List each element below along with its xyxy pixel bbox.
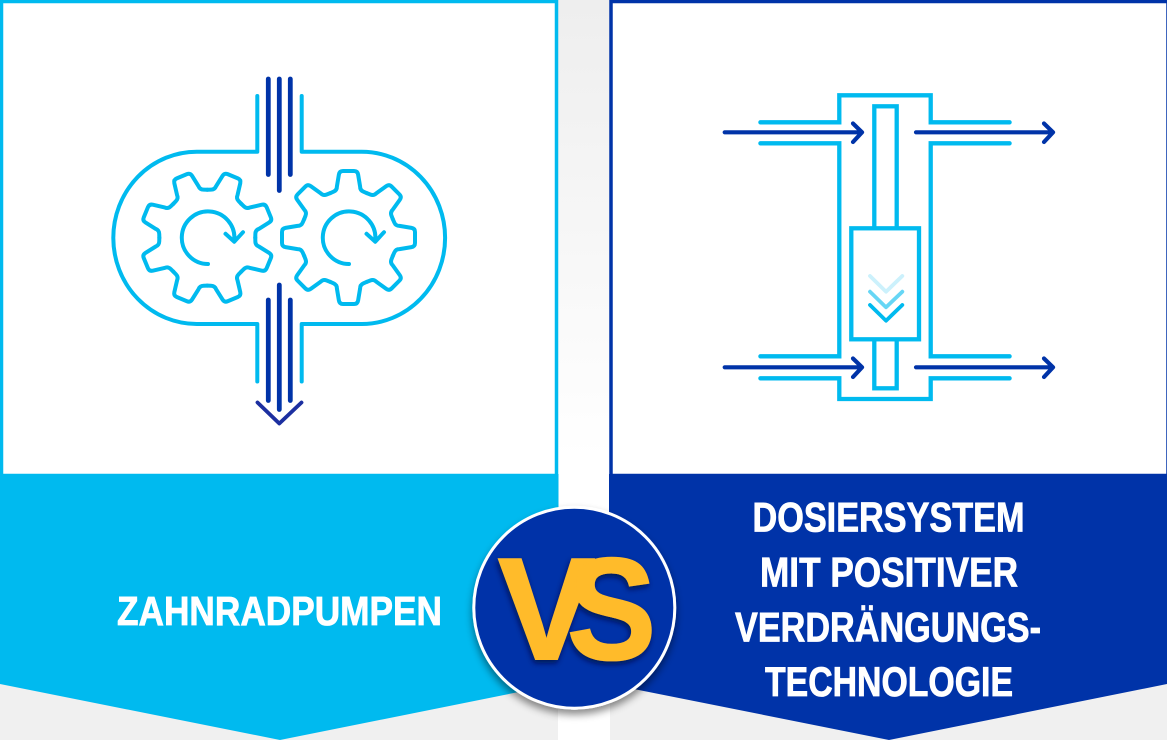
- piston: [851, 228, 919, 339]
- heading: Dosiersystem mit positiver Verdrängungstechnologie: MIT POSITIVER: [760, 549, 1018, 596]
- panel frame: dosing system illustration area: [611, 2, 1167, 476]
- icon: dosing system: [725, 95, 1053, 399]
- piston rod: [874, 106, 897, 388]
- heading: Zahnradpumpen: ZAHNRADPUMPEN: [117, 588, 442, 634]
- left gear: [120, 151, 294, 325]
- right gear: [282, 171, 415, 304]
- housing: [760, 95, 1010, 399]
- heading: Dosiersystem mit positiver Verdrängungstechnologie: [735, 494, 1041, 705]
- inflow lines: [268, 79, 290, 190]
- piston direction chevrons: [870, 276, 902, 321]
- badge circle: [474, 507, 675, 708]
- outflow arrowhead: [258, 402, 302, 424]
- heading: Dosiersystem mit positiver Verdrängungstechnologie: DOSIERSYSTEM: [752, 494, 1024, 541]
- banner: Dosiersystem: [609, 474, 1167, 740]
- VS text: S: [567, 528, 656, 690]
- VS text: V: [498, 528, 595, 690]
- panel frame: gear pump illustration area: [2, 2, 556, 476]
- center gutter: [558, 0, 610, 740]
- VS badge: [474, 507, 675, 708]
- pump housing: [113, 96, 445, 382]
- VS text: [498, 528, 656, 690]
- heading: Dosiersystem mit positiver Verdrängungstechnologie: VERDRÄNGUNGS-: [735, 604, 1041, 651]
- panel: Zahnradpumpen: [0, 2, 558, 740]
- outflow lines: [268, 285, 290, 410]
- right rotation arrow: [323, 211, 384, 264]
- left rotation arrow: [182, 211, 243, 264]
- flow arrows: [725, 124, 1053, 377]
- panel: Dosiersystem: [609, 2, 1167, 740]
- banner: Zahnradpumpen: [0, 474, 558, 740]
- heading: Dosiersystem mit positiver Verdrängungstechnologie: TECHNOLOGIE: [765, 658, 1013, 705]
- icon: gear pump: [113, 79, 445, 424]
